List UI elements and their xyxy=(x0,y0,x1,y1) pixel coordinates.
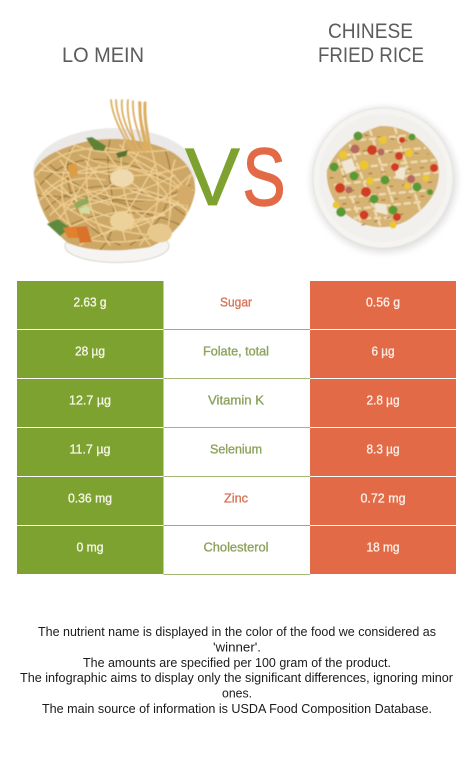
red pepper xyxy=(335,137,438,221)
column: nutrient names: Vitamin K xyxy=(208,392,264,408)
image: plate of fried rice xyxy=(312,108,456,252)
VS heading xyxy=(185,132,286,223)
footnote text: The infographic aims to display only the significant differences, ignoring minor xyxy=(20,670,454,685)
title: Lo Mein: LO MEIN xyxy=(62,44,144,67)
image: bowl of lo mein xyxy=(33,100,197,262)
column: nutrient names xyxy=(164,294,310,575)
column: Lo Mein values: 2.63 g xyxy=(74,294,106,310)
column: Lo Mein values xyxy=(17,281,164,574)
column: Chinese Fried Rice values: 8.3 µg xyxy=(366,442,400,456)
column: nutrient names: Zinc xyxy=(224,490,248,506)
column: nutrient names: Folate, total xyxy=(203,344,269,358)
footnote text xyxy=(20,624,454,716)
corn xyxy=(332,136,430,228)
chicken xyxy=(341,158,406,215)
noodles on fork xyxy=(111,100,150,152)
column: nutrient names: Sugar xyxy=(220,294,253,310)
title: Chinese Fried Rice: CHINESE xyxy=(328,20,413,43)
vegetables and shrimp xyxy=(86,137,106,151)
column: Chinese Fried Rice values: 0.56 g xyxy=(366,294,400,310)
column: Lo Mein values: 11.7 µg xyxy=(70,442,110,456)
column: Lo Mein values: 0.36 mg xyxy=(68,490,112,506)
footnote text: The nutrient name is displayed in the color of the food we considered as xyxy=(38,624,436,639)
column: Chinese Fried Rice values: 18 mg xyxy=(366,540,400,554)
column: Chinese Fried Rice values: 2.8 µg xyxy=(366,392,400,408)
column: nutrient names: Selenium xyxy=(210,442,262,456)
VS heading: S xyxy=(242,132,286,223)
comparison table xyxy=(17,281,456,575)
column: Lo Mein values: 12.7 µg xyxy=(69,392,111,408)
column: Lo Mein values: 0 mg xyxy=(76,540,104,554)
footnote text: The amounts are specified per 100 gram of the product. xyxy=(83,655,391,670)
footnote text: The main source of information is USDA Food Composition Database. xyxy=(42,701,432,716)
rice grains xyxy=(330,128,438,225)
column: nutrient names: Cholesterol xyxy=(204,540,269,554)
column: Lo Mein values: 28 µg xyxy=(75,344,105,358)
column: Chinese Fried Rice values: 0.72 mg xyxy=(360,490,406,506)
title: Chinese Fried Rice xyxy=(318,20,424,67)
peas xyxy=(330,132,433,217)
column: Chinese Fried Rice values xyxy=(310,281,456,574)
footnote text: ones. xyxy=(222,686,252,700)
title: Chinese Fried Rice: FRIED RICE xyxy=(318,44,424,67)
pink ham xyxy=(346,144,415,194)
footnote text: 'winner'. xyxy=(213,640,261,654)
column: Chinese Fried Rice values: 6 µg xyxy=(372,344,394,358)
VS heading: V xyxy=(185,132,240,223)
